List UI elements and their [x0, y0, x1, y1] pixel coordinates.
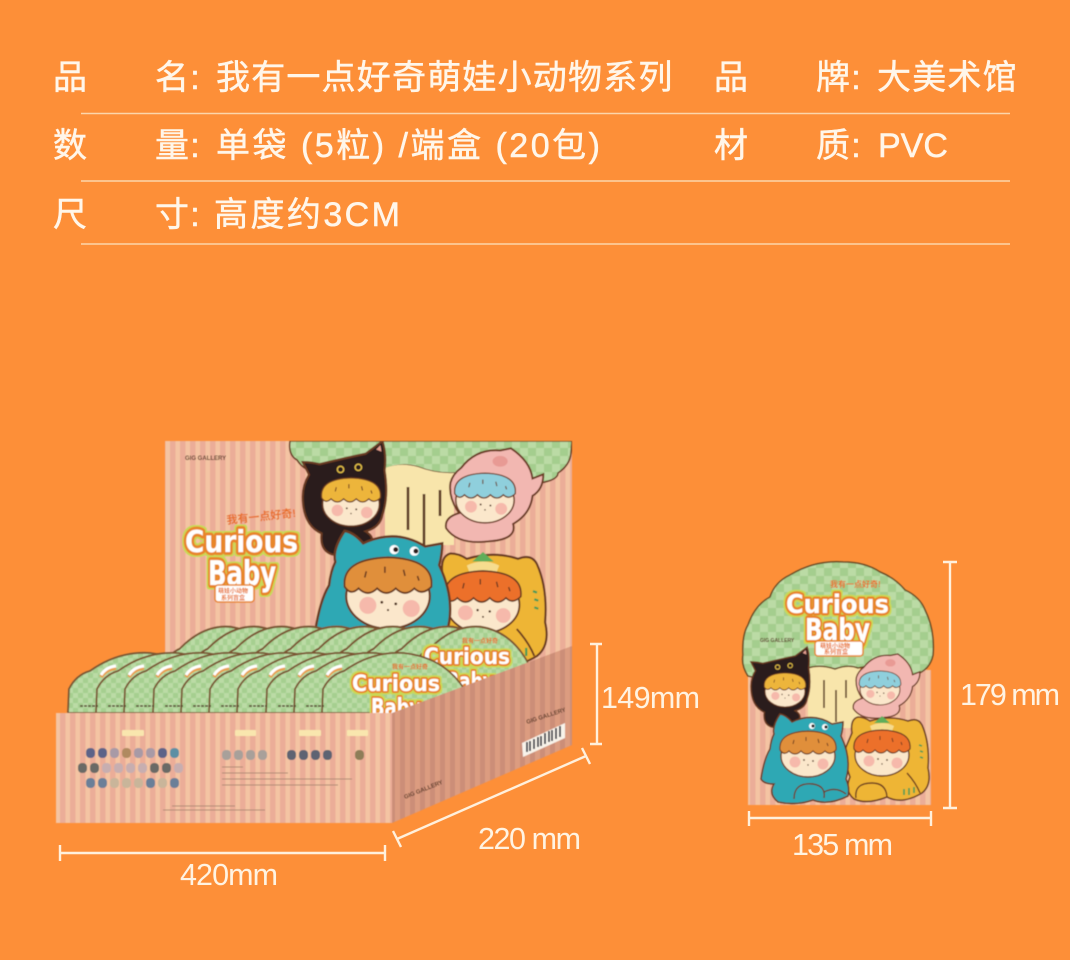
row: brand — [714, 59, 1018, 97]
character: pink pig — [446, 448, 543, 542]
front face fine print — [163, 767, 352, 810]
character: pink pig — [853, 654, 920, 718]
pouch trunk — [808, 660, 860, 728]
character: teal dino — [314, 529, 452, 628]
pouch tree crown — [743, 562, 933, 677]
side face barcode — [522, 723, 565, 757]
pouch logo: 我有一点好奇! — [830, 579, 881, 589]
front row of pouches: 我有一点好奇 — [392, 663, 428, 671]
front row of pouches — [68, 653, 469, 722]
back panel logo: 萌娃小动物 — [218, 587, 248, 595]
box side face — [392, 646, 572, 823]
box side face: GIG GALLERY — [404, 780, 444, 801]
back panel logo: GIG GALLERY — [185, 456, 226, 462]
single pouch product image — [743, 562, 933, 805]
row: size: 寸: — [155, 196, 201, 234]
dimension: box height 149mm — [590, 644, 700, 744]
back panel logo: Baby — [208, 554, 276, 594]
row: brand: 牌: — [816, 59, 862, 97]
pouch logo: GIG GALLERY — [760, 638, 795, 644]
character: black cat — [751, 647, 810, 728]
back row of pouches — [161, 627, 536, 700]
row: quantity: 单袋 (5粒) /端盒 (20包) — [216, 127, 600, 165]
front face thumbnails — [78, 748, 364, 788]
back row of pouches: Curious — [424, 645, 510, 670]
display box product image — [56, 441, 572, 823]
dimension: pouch height 179mm — [943, 562, 1060, 808]
back row of pouches: Baby — [446, 667, 494, 696]
row: size: 高度约3CM — [214, 196, 400, 234]
row: material — [714, 127, 948, 165]
pouch body — [748, 670, 931, 805]
row: size — [53, 196, 400, 234]
dimension: pouch height 179mm: 179 mm — [960, 678, 1060, 712]
front row of pouches: Baby — [371, 693, 421, 722]
row: brand: 品 — [714, 59, 749, 97]
dimension: pouch width 135mm — [749, 811, 931, 862]
dimension: box width 420mm: 420mm — [180, 858, 278, 892]
specification table — [53, 59, 1018, 244]
character: yellow dino — [434, 552, 547, 668]
row: size: 尺 — [53, 196, 88, 234]
back panel logo — [185, 456, 298, 602]
box front face — [56, 713, 392, 823]
pouch logo: Curious — [786, 590, 889, 620]
row: product name: 品 — [53, 59, 88, 97]
back row of pouches: 我有一点好奇 — [462, 637, 498, 645]
row: material: 质: — [816, 127, 862, 165]
dimension: box height 149mm: 149mm — [601, 681, 700, 715]
pouch logo: 系列盲盒 — [824, 648, 848, 656]
row: material: 材 — [714, 127, 749, 165]
row: quantity: 数 — [53, 127, 88, 165]
dimension: box depth 220mm: 220 mm — [478, 822, 581, 856]
character: black cat — [303, 441, 386, 556]
character: yellow dino — [846, 716, 929, 802]
back panel tree art — [290, 441, 572, 670]
row: brand: 大美术馆 — [877, 59, 1018, 97]
dimension: box width 420mm — [60, 845, 385, 892]
character: teal dino — [761, 714, 849, 804]
back panel logo: 我有一点好奇! — [226, 506, 297, 527]
dimension: box depth 220mm — [393, 748, 590, 856]
box back panel — [165, 441, 572, 713]
row: product name: 我有一点好奇萌娃小动物系列 — [216, 59, 674, 97]
pouch logo — [760, 579, 889, 656]
row: material: PVC — [878, 127, 948, 165]
row: product name: 名: — [155, 59, 201, 97]
box side face: GIG GALLERY — [526, 707, 567, 726]
back panel logo: Curious — [185, 525, 298, 560]
row: quantity: 量: — [155, 127, 201, 165]
pouch logo: 萌娃小动物 — [820, 642, 850, 650]
back panel logo: 系列盲盒 — [221, 594, 245, 602]
dimension: pouch width 135mm: 135 mm — [792, 828, 893, 862]
pouch characters — [751, 647, 929, 804]
front face series labels — [122, 730, 368, 736]
front row of pouches: Curious — [352, 672, 440, 697]
pouch logo: Baby — [805, 613, 870, 648]
